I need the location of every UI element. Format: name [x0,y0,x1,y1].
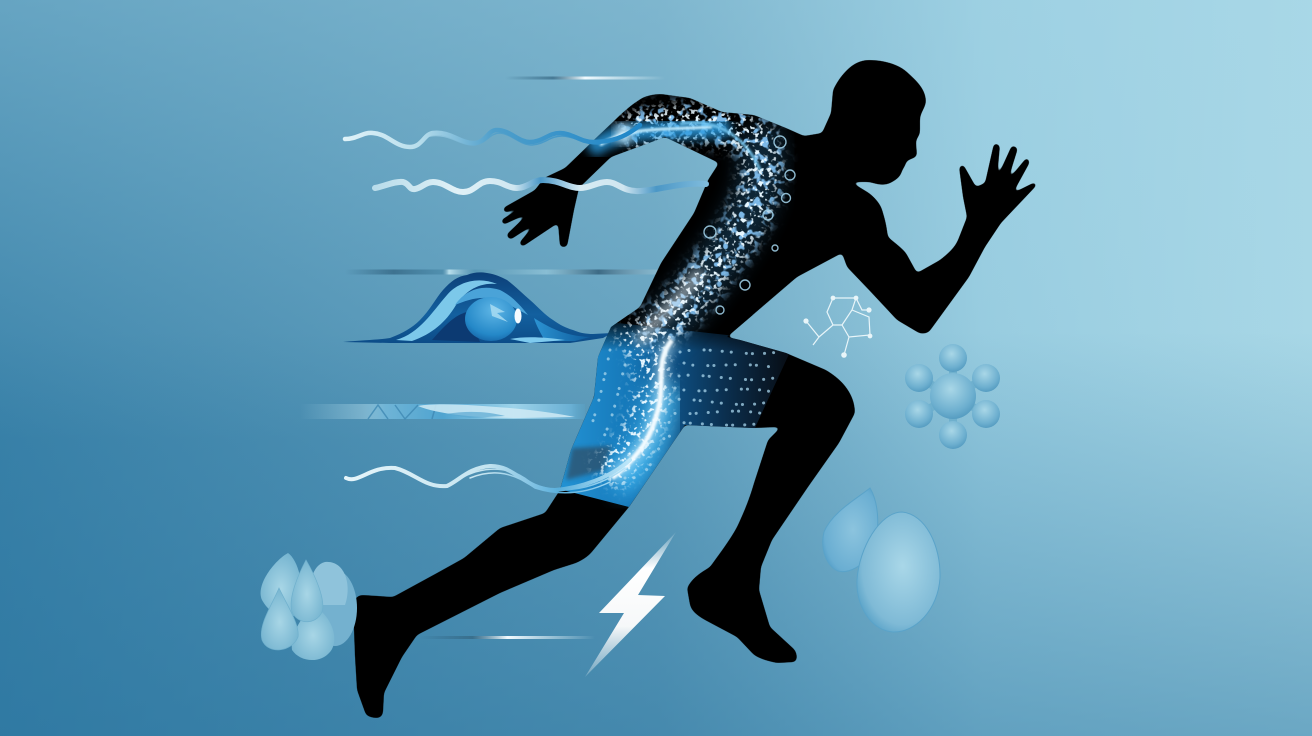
white energy core [640,270,700,345]
lightning bolt [585,532,676,677]
water wave swell [343,272,612,343]
molecule line diagram [804,296,872,357]
reflective water band [300,404,585,419]
bubbles along spine, blue layer [625,123,763,340]
speed streak: middle [345,270,670,274]
black body shape [354,60,1036,718]
speed streak: top [505,76,665,80]
speed streak: lower [420,636,595,639]
glowing arm water [590,128,730,150]
runner silhouette [354,60,1036,718]
scattered bubble rings [704,136,795,314]
flowing wave ribbon: forearm [375,180,706,192]
molecule ball cluster [905,344,1000,449]
flowing wave ribbon: thigh [346,460,630,493]
water drop cluster: bottom left [261,553,357,660]
discrete bubbles on thigh [590,350,778,478]
water filled hips and thigh [555,320,790,507]
spine blue haze [655,130,762,335]
water drops: right pair [823,488,940,632]
water effects inside body [555,123,795,507]
bubbles along spine, white layer [605,124,761,478]
flowing wave ribbon: upper arm [345,125,640,147]
